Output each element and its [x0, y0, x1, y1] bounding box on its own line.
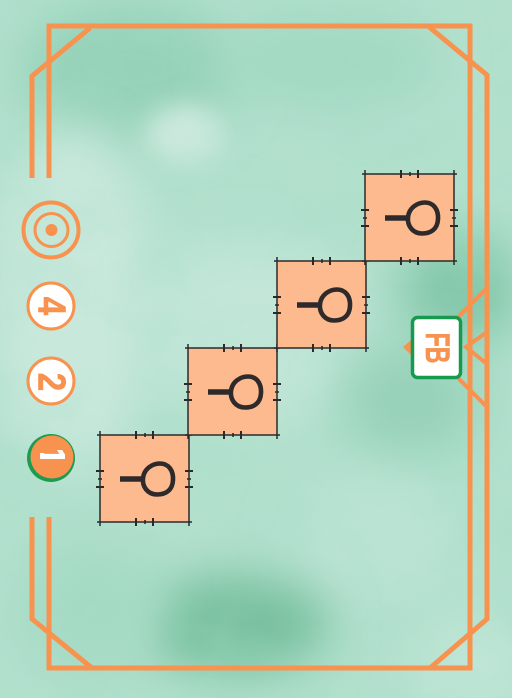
outer frame line right — [428, 26, 487, 668]
FB tag — [412, 318, 460, 378]
outer frame line left bottom — [32, 517, 92, 668]
badge 2 — [28, 358, 74, 404]
badge 1: 1 — [32, 446, 71, 466]
badge 4: 4 — [30, 297, 74, 315]
right side chevrons — [458, 288, 487, 407]
square 4 — [361, 170, 458, 265]
icon: target — [24, 202, 78, 258]
badge 2: 2 — [30, 373, 74, 391]
square 2 — [184, 344, 281, 439]
badge 1 — [27, 434, 75, 482]
square 3 — [273, 257, 370, 352]
step squares — [96, 170, 458, 526]
badge 4 — [28, 283, 74, 329]
FB pointer — [403, 340, 411, 355]
outer frame line left top — [32, 28, 90, 178]
FB tag: FB — [418, 333, 455, 363]
square 1 — [96, 431, 193, 526]
inner frame line — [49, 26, 470, 668]
